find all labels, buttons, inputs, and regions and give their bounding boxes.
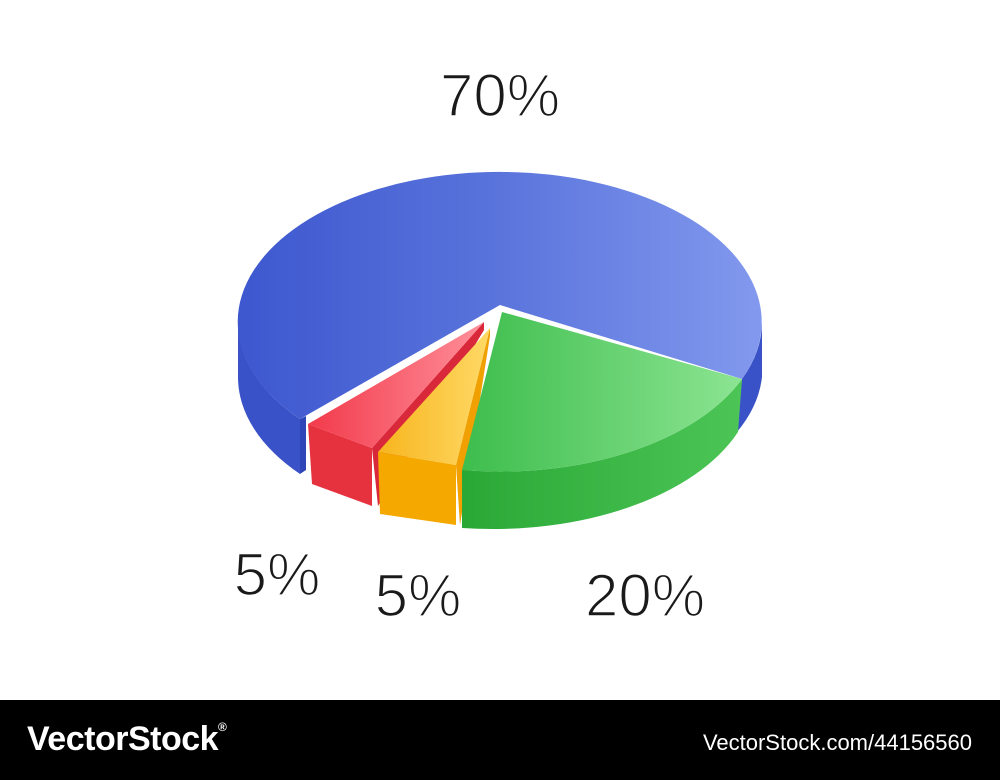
slice: yellow 5% <box>378 328 490 525</box>
slice: blue 70% <box>238 172 762 474</box>
label: 70%: 70% <box>440 62 560 129</box>
label: 5% yellow: 5% <box>375 562 461 629</box>
label: 5% red: 5% <box>234 541 320 608</box>
slice: green 20% <box>462 312 742 529</box>
label: 20%: 20% <box>585 562 705 629</box>
slice: red 5% <box>308 322 484 506</box>
footer brand: VectorStock® <box>27 720 226 758</box>
labels <box>234 62 705 629</box>
footer id: VectorStock.com/44156560 <box>703 730 972 755</box>
footer bar <box>0 700 1000 780</box>
